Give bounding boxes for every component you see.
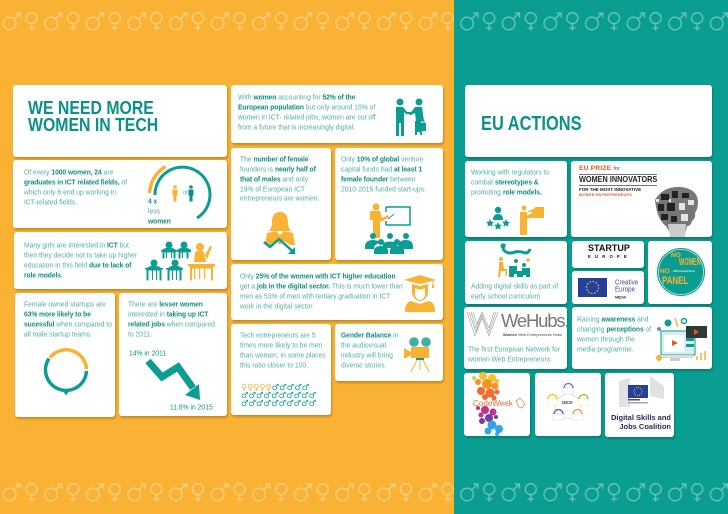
text: 63% more likely to be — [24, 310, 91, 319]
text: the audiovisual — [341, 341, 386, 350]
text: women through the — [577, 334, 635, 343]
panel: we need more women in tech — [13, 85, 227, 157]
text: Only 10% of global venture — [341, 155, 424, 164]
creative europe text: Europe — [615, 287, 635, 294]
badge text: NO — [671, 252, 681, 259]
badge hashtag: #WomenInTech — [673, 269, 695, 273]
text: combat stereotypes & — [471, 178, 539, 187]
creative europe text — [615, 279, 638, 300]
desi label: DESI — [562, 400, 573, 405]
title — [28, 98, 158, 135]
panel: digital skills curriculum — [465, 241, 567, 304]
logo sub text: EUROPE — [588, 254, 631, 258]
icon: film camera — [404, 337, 431, 372]
creative europe text: Creative — [615, 280, 638, 287]
text: from a future that is increasingly digital. — [238, 122, 355, 131]
badge text: NO — [660, 268, 670, 274]
text: that of males and only — [240, 174, 308, 183]
text: times more likely to be men — [240, 341, 322, 350]
text: this ratio closer to 100. — [240, 360, 308, 369]
text — [24, 241, 137, 279]
chart: falling arrow — [145, 358, 200, 400]
text: The number of female — [240, 155, 308, 164]
text: to 2011. — [128, 329, 152, 338]
text: then they decide not to take up higher — [24, 251, 137, 260]
text: diverse stories. — [341, 360, 386, 369]
text: Tech entrepreneurs are 5 — [240, 331, 316, 340]
panel: venture capital — [335, 148, 443, 260]
text: Working with regulators to — [471, 168, 549, 177]
panel: code week — [464, 373, 530, 436]
panel: no women no panel — [648, 241, 712, 304]
panel: eu actions — [465, 85, 712, 157]
gender symbol strip: top — [2, 12, 728, 31]
text: Of every 1000 women, 24 are — [24, 168, 113, 177]
teal background half — [454, 0, 728, 514]
panel: raising awareness — [572, 307, 712, 369]
panel: female founders — [231, 148, 331, 260]
panel: desi — [535, 373, 601, 436]
panel: wehubs — [464, 307, 567, 369]
icon: classroom — [145, 242, 215, 280]
text — [341, 331, 398, 369]
icon: handshake — [396, 98, 426, 136]
logo subtext: Women Web Entrepreneurs Hubs — [503, 332, 562, 337]
panel: female owned startups — [15, 293, 115, 417]
text: founders is nearly half of — [240, 165, 316, 174]
subline orange: WOMEN ENTREPRENEURS — [579, 193, 632, 197]
text: women Web Entrepreneurs. — [468, 355, 552, 364]
title: WOMEN IN TECH — [28, 115, 158, 135]
text: entrepreneurs are women. — [240, 194, 319, 203]
icon grid: female and male symbols — [241, 383, 316, 409]
text: 2010-2015 funded start-ups. — [341, 184, 426, 193]
text — [240, 331, 326, 369]
panel: eu prize — [571, 161, 712, 237]
text: industry will bring — [341, 350, 393, 359]
women innovators: WOMEN INNOVATORS — [579, 174, 657, 184]
text — [577, 315, 652, 353]
text: Gender Balance in — [341, 331, 398, 340]
panel: lesser women — [119, 293, 227, 416]
heading: EU ACTIONS — [481, 112, 582, 135]
text: Many girls are interested in ICT but — [24, 241, 129, 250]
badge — [657, 248, 705, 296]
text: work in the digital sector. — [240, 301, 314, 310]
text — [128, 300, 215, 338]
text: There are lesser women — [128, 300, 203, 309]
panel: 25 percent — [231, 264, 443, 320]
4x less women: 4 x — [148, 197, 157, 206]
text — [471, 282, 558, 301]
text — [24, 300, 112, 338]
icon: graduate — [404, 275, 436, 312]
text: than women; in some places — [240, 350, 326, 359]
panel: digital skills and jobs coalition — [605, 373, 674, 437]
logo text: WeHubs. — [501, 310, 568, 331]
text — [471, 168, 549, 196]
text: interested in taking up ICT — [128, 310, 208, 319]
text — [24, 168, 127, 206]
icon grid: female and male symbols: ♂♂♂♂♂♂♂♂♂♂ — [241, 399, 316, 409]
prize heading: EU PRIZE for — [579, 165, 620, 172]
gender symbol strip: bottom — [2, 483, 728, 502]
chart: arcs and people icons — [148, 165, 212, 220]
icon: falling woman — [263, 212, 295, 254]
chart: desi diagram — [546, 382, 590, 420]
text: changing perceptions of — [577, 325, 651, 334]
text: education in this field due to lack of — [24, 260, 131, 269]
text: ICT-related fields. — [24, 197, 77, 206]
chart: donut — [44, 348, 88, 396]
text: Raising awareness and — [577, 315, 648, 324]
of: of — [183, 191, 187, 197]
text: media programme. — [577, 344, 634, 353]
logo: zigzag w — [466, 312, 498, 337]
text: promoting role models. — [471, 187, 542, 196]
logo text: STARTUP — [588, 243, 630, 253]
text: European population but only around 15% of — [238, 103, 375, 112]
image: mosaic head — [655, 186, 698, 237]
text: role models. — [24, 270, 63, 279]
text: graduates in ICT related fields, of — [24, 178, 127, 187]
subline: FOR THE MOST INNOVATIVE — [579, 187, 641, 192]
label 2011: 14% in 2011 — [129, 349, 166, 358]
label 2015: 11.8% in 2015 — [170, 403, 213, 412]
text: all male startup teams. — [24, 329, 92, 338]
panel: role models — [14, 232, 227, 289]
4x less women: less — [148, 206, 160, 215]
text: which only 6 end up working in — [24, 187, 116, 196]
text: 19% of European ICT — [240, 184, 305, 193]
image: coloured dots — [472, 372, 526, 436]
text — [240, 272, 403, 310]
text — [468, 345, 560, 364]
panel: startup europe — [572, 241, 644, 268]
panel: regulators — [465, 161, 567, 237]
eu flag — [578, 278, 607, 297]
icon grid: female and male symbols: ♀♀♀♀♀♂♂♂♂♂ — [241, 383, 309, 393]
text: With women accounting for 52% of the — [238, 93, 355, 102]
panel: 52 percent — [231, 85, 443, 143]
text: related jobs when compared — [128, 319, 215, 328]
text — [341, 155, 426, 193]
panel: creative europe — [572, 271, 644, 304]
code week text: CodeWeek — [473, 398, 513, 408]
title: WE NEED MORE — [28, 98, 154, 118]
icon: school children — [498, 243, 532, 277]
coalition text: Jobs Coalition — [619, 422, 671, 430]
icon: stars and presenter — [486, 206, 544, 235]
text: men as 53% of men with tertiary graduation in ICT — [240, 291, 390, 300]
text: female founder between — [341, 174, 416, 183]
creative europe text: MEDIA — [615, 295, 626, 300]
icon grid: female and male symbols: ♂♂♂♂♂♂♂♂♂♂ — [241, 391, 316, 401]
image: building and flag — [605, 373, 674, 437]
text: Female owned startups are — [24, 300, 106, 309]
text: Only 25% of the women with ICT higher education — [240, 272, 395, 281]
rule — [579, 185, 657, 186]
text: sucessful when compared to — [24, 319, 112, 328]
coalition text: Digital Skills and — [611, 413, 671, 422]
text: Adding digital skills as part of — [471, 282, 558, 291]
rule — [579, 174, 657, 175]
4x less women: women — [148, 216, 171, 225]
badge text: PANEL — [662, 275, 688, 287]
badge text: WOMEN — [679, 257, 701, 268]
icon: media monitor — [656, 318, 707, 361]
icon: teacher and audience — [365, 204, 413, 254]
text: The first European Network for — [468, 345, 560, 354]
panel: 1000 women — [13, 160, 227, 228]
panel: tech entrepreneurs — [231, 324, 331, 415]
4x less women — [148, 197, 171, 225]
text: capital funds had at least 1 — [341, 165, 422, 174]
text: early school curriculum — [471, 292, 540, 301]
text — [238, 93, 376, 131]
panel: gender balance — [335, 324, 443, 381]
text: get a job in the digital sector. This is much lower than — [240, 282, 403, 291]
text: women in ICT- related jobs, women are cut off — [238, 112, 376, 121]
text — [240, 155, 319, 203]
coalition text — [605, 414, 671, 431]
